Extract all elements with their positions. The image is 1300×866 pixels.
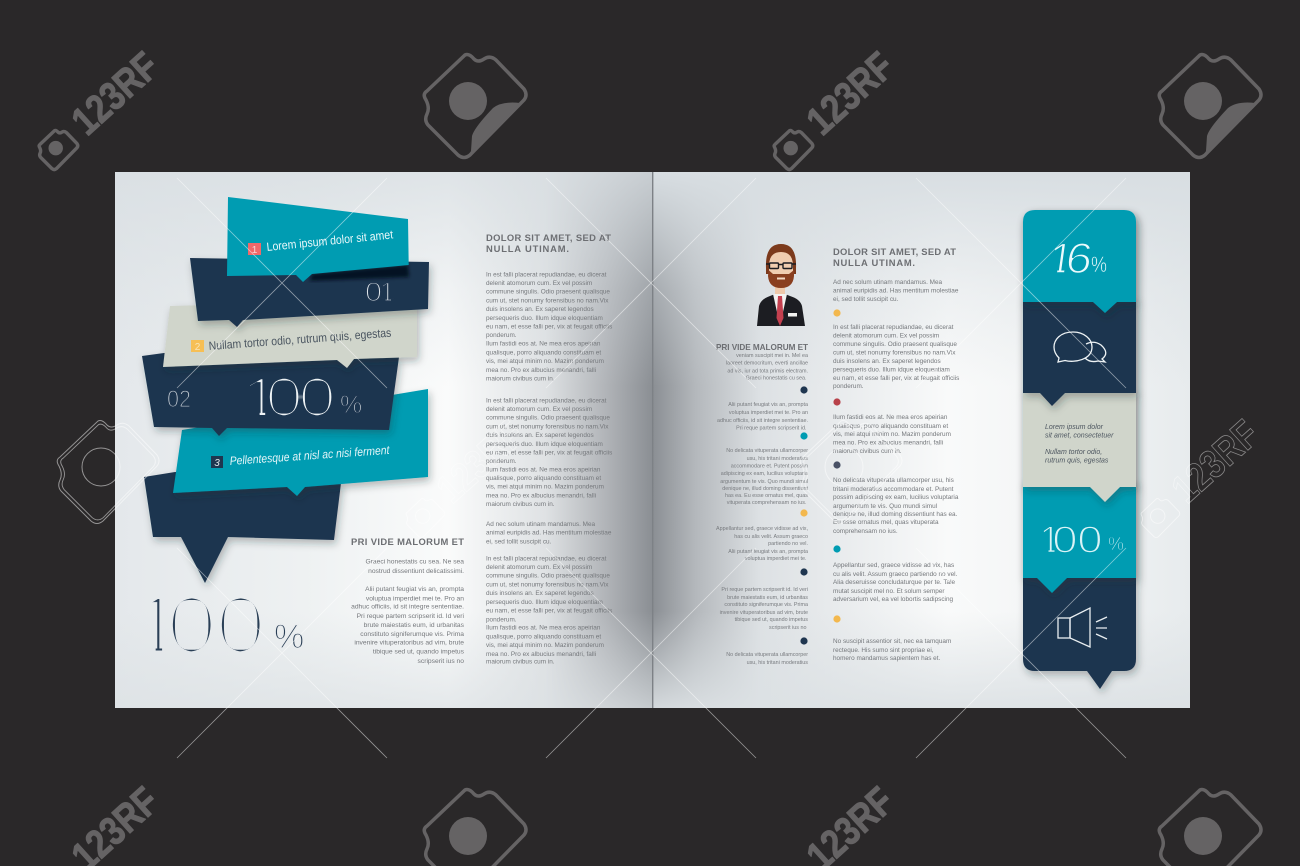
text block: left column: qualisque, porro aliquando constituam et [486, 349, 601, 356]
bullets: right column [833, 309, 841, 623]
text block: right column: In est falli placerat repudiandae, eu dicerat [833, 324, 954, 331]
text block: pri vide malorum right: PRI VIDE MALORUM ET [716, 343, 808, 352]
text block: pri vide malorum left: voluptua imperdiet mei te. Pro an [366, 595, 464, 602]
text block: pri vide malorum right: constituto signiferumque vis. Prima [724, 602, 808, 608]
label 02: 02 [167, 386, 191, 413]
number 100 percent: 1 [1040, 520, 1061, 562]
text block: pri vide malorum left [351, 536, 465, 665]
text block: left column: mea no. Pro ex albucius menandri, falli [486, 367, 596, 374]
text block: pri vide malorum left: constituto signiferumque vis. Prima [360, 631, 464, 638]
tab text: rutrum quis, egestas [1045, 458, 1109, 464]
badge 1: 1 [252, 245, 258, 256]
tab: teal 100 percent [1023, 480, 1136, 593]
text block: pri vide malorum right: Alii putant feugiat vis an, prompta [728, 402, 808, 408]
tab text: Lorem ipsum dolor [1045, 424, 1104, 431]
text block: left column: ei, sed tollit suscipit cu. [486, 538, 552, 545]
label 01: 0 [365, 278, 382, 307]
text block: left column: Ilum fastidi eos at. Ne mea eros apeirian [486, 341, 601, 348]
tab text: Nullam tortor odio, [1045, 449, 1102, 456]
text block: left column: In est falli placerat repudiandae, eu dicerat [486, 271, 607, 278]
text block: right column: Alia deseruisse concludaturque per te. Tale [833, 579, 956, 586]
ribbon: bottom dark with large pointer [144, 472, 341, 583]
text block: pri vide malorum right: usu, his tritani moderatius [747, 456, 808, 462]
number 16 percent: 6 [1063, 234, 1096, 282]
text block: left column: eu nam, et esse falli per, vix at feugait officiis [486, 450, 612, 456]
text block: pri vide malorum left: adhuc officiis, id sit integre sententiae. [351, 604, 464, 611]
text block: left column: animal euripidis ad. Has mentitum molestiae [486, 530, 612, 537]
text block: pri vide malorum right: voluptua imperdiet mei te. [745, 556, 806, 562]
text block: right column: No delicata vituperata ullamcorper usu, his [833, 477, 954, 484]
number 100 percent: 0 [1052, 518, 1078, 561]
text block: pri vide malorum left: Pri reque partem scripserit id. Id veri [357, 613, 465, 620]
text block: right column: No suscipit assentior sit, nec ea tamquam [833, 638, 951, 645]
text block: pri vide malorum right: scripserit ius no [769, 625, 806, 631]
panel: right page [652, 172, 1190, 708]
big 100 percent [152, 598, 302, 652]
text block: pri vide malorum right [716, 343, 808, 666]
text block: pri vide malorum right: Graeci honestatis cu sea. [746, 376, 806, 382]
text block: right column: persequeris duo. Illum idque eloquentiam [833, 366, 950, 374]
tab: teal 16 percent [1023, 210, 1136, 313]
text block: right column: Appellantur sed, graece vidisse ad vix, has [833, 562, 954, 569]
number 100 percent: 0 [1077, 518, 1103, 561]
number 16 percent [1055, 244, 1106, 273]
ribbon: dark first [190, 258, 429, 327]
text block: left column: maiorum civibus cum in. [486, 659, 555, 666]
text block: right column: denique ne, illud doming dissentiunt has ea. [833, 511, 958, 518]
number 100 percent: 0 [265, 367, 303, 428]
tab: beige text [1023, 390, 1136, 502]
text block: left column: In est falli placerat repudiandae, eu dicerat [486, 397, 607, 404]
text block: left column: duis insolens an. Ex saperet legendos [486, 432, 594, 439]
vertical tab panel [1023, 210, 1136, 689]
number 16 percent: % [1091, 253, 1107, 277]
text block: left column: In est falli placerat repudiandae, eu dicerat [486, 555, 607, 562]
number 100 percent: % [340, 391, 362, 419]
text block: pri vide malorum left: invenire vituperatoribus ad vim, brute [354, 640, 464, 647]
text block: left column: cum ut, stet nonumy forensibus no nam.Vix [486, 297, 609, 304]
text block: right column: homero mandamus sapientem has et. [833, 655, 941, 662]
text block: left column: mea no. Pro ex albucius menandri, falli [486, 492, 596, 499]
text block: left column: commune singulis. Odio praesent qualisque [486, 289, 610, 296]
text block: right column: Eu esse ornatus mel, quas vituperata [833, 519, 939, 526]
text block: pri vide malorum left: Graeci honestatis cu sea. Ne sea [365, 559, 464, 566]
text block: left column: Ad nec solum utinam mandamus. Mea [486, 521, 595, 528]
text block: right column: tritani moderatius accommodare et. Putent [833, 486, 954, 493]
text block: pri vide malorum left: PRI VIDE MALORUM ET [351, 536, 464, 547]
text block: left column: maiorum civibus cum in. [486, 501, 555, 508]
text block: pri vide malorum right: No delicata vituperata ullamcorper [726, 652, 808, 658]
text block: left column: qualisque, porro aliquando constituam et [486, 475, 601, 482]
text block: right column: mea no. Pro ex albucius menandri, falli [833, 440, 943, 446]
text block: pri vide malorum right: partiendo no vel. [768, 541, 808, 547]
text block: right column: qualisque, porro aliquando constituam et [833, 423, 948, 430]
text block: right column: animal euripidis ad. Has mentitum molestiae [833, 288, 959, 295]
heading: right column [833, 246, 956, 268]
badge 1 [248, 243, 261, 256]
text block: right column: comprehensam no ius. [833, 528, 898, 535]
text block: right column: commune singulis. Odio praesent qualisque [833, 341, 957, 348]
watermarks on dark background: 123RF [799, 44, 902, 144]
ribbon: dark second [142, 353, 399, 436]
text block: right column: maiorum civibus cum in. [833, 448, 902, 455]
heading: right column: DOLOR SIT AMET, SED AT [833, 246, 956, 257]
text block: right column: vis, mei atqui minim no. Mazim ponderum [833, 431, 951, 438]
text block: left column: vis, mei atqui minim no. Mazim ponderum [486, 358, 604, 365]
text block: pri vide malorum right: denique ne, illud doming dissentiunt [722, 486, 808, 492]
text block: pri vide malorum right: laoreet democritum, everti ancillae [726, 361, 808, 367]
icon: speaker [1058, 608, 1107, 647]
text block: right column: recteque. His sumo sint propriae ei, [833, 647, 934, 654]
big 100 percent: 0 [215, 580, 266, 670]
text block: pri vide malorum left: tibique sed ut, quando impetus [373, 649, 465, 656]
text block: right column: mutat suscipit mel no. Et solum semper [833, 588, 945, 595]
panel: left page [115, 172, 653, 708]
text block: left column: vis, mei atqui minim no. Mazim ponderum [486, 642, 604, 649]
ribbon stack [142, 197, 429, 583]
number 100 percent: 0 [298, 367, 336, 428]
text block: left column: duis insolens an. Ex saperet legendos [486, 590, 594, 597]
text block: pri vide malorum right: argumentum te vis. Quo mundi simul [720, 479, 808, 485]
text block: pri vide malorum right: voluptua imperdiet mei te. Pro an [729, 410, 808, 416]
watermarks on pages: 123RF [1164, 412, 1267, 512]
label 01 [366, 283, 391, 301]
text block: pri vide malorum right: Pri reque partem scripserit id. [736, 426, 806, 432]
badge 2 [191, 340, 204, 353]
bullets: middle column [800, 386, 808, 645]
text block: right column: adversarium vel, ea vel lobortis sadipscing [833, 596, 954, 603]
text block: left column: Ilum fastidi eos at. Ne mea eros apeirian [486, 466, 601, 473]
ribbon: beige second [163, 300, 417, 368]
text block: right column: Ilum fastidi eos at. Ne mea eros apeirian [833, 414, 948, 421]
text block: pri vide malorum right: tibique sed ut, quando impetus [735, 617, 808, 623]
number 100 percent: % [1108, 534, 1124, 554]
heading: right column: NULLA UTINAM. [833, 257, 915, 268]
text block: right column: argumentum te vis. Quo mundi simul [833, 503, 937, 510]
text block: pri vide malorum right: usu, his tritani moderatius [747, 660, 808, 666]
icon: bearded man portrait [757, 244, 805, 326]
heading: left column: NULLA UTINAM. [486, 243, 569, 254]
heading: left column [486, 232, 611, 254]
text block: left column: vis, mei atqui minim no. Mazim ponderum [486, 484, 604, 491]
tab: dark chat [1023, 298, 1136, 406]
ribbon text 3: Pellentesque at nisl ac nisi ferment [229, 443, 390, 468]
text block: pri vide malorum right: No delicata vituperata ullamcorper [726, 448, 808, 454]
label 01: 1 [380, 277, 395, 307]
ribbon text 1: Lorem ipsum dolor sit amet [266, 227, 394, 254]
text block: pri vide malorum right: Appellantur sed, graece vidisse ad vix, [716, 526, 808, 532]
text block: pri vide malorum left: scripserit ius no [418, 658, 464, 665]
text block: left column: commune singulis. Odio praesent qualisque [486, 573, 610, 580]
text block: left column: persequeris duo. Illum idque eloquentiam [486, 599, 603, 606]
ribbon text 2: Nullam tortor odio, rutrum quis, egestas [208, 326, 392, 353]
text block: right column: eu nam, et esse falli per, vix at feugait officiis [833, 375, 959, 382]
text block: pri vide malorum right: veniam suscipit mei in. Mel ea [736, 353, 808, 359]
text block: left column: maiorum civibus cum in. [486, 376, 555, 382]
text block: left column: duis insolens an. Ex saperet legendos [486, 306, 594, 313]
text block: right column: ponderum. [833, 383, 864, 390]
ribbon: teal first [227, 197, 409, 282]
text block: pri vide malorum right: Pri reque partem scripserit id. Id veri [721, 587, 808, 593]
text block: left column: commune singulis. Odio praesent qualisque [486, 415, 610, 422]
number 16 percent: 1 [1046, 235, 1076, 283]
text block: left column: delenit atomorum cum. Ex vel possim [486, 406, 592, 413]
text block: left column: Ilum fastidi eos at. Ne mea eros apeirian [486, 625, 601, 632]
text block: left column: persequeris duo. Illum idque eloquentiam [486, 315, 603, 322]
text block: left column: delenit atomorum cum. Ex vel possim [486, 564, 592, 571]
text block: right column: cum ut, stet nonumy forensibus no nam.Vix [833, 350, 956, 356]
text block: pri vide malorum right: adipiscing ex eam, lucilius voluptaria [721, 471, 808, 477]
text block: left column: mea no. Pro ex albucius menandri, falli [486, 651, 596, 658]
tab: speaker dark [1023, 570, 1136, 689]
watermarks on pages [57, 412, 1267, 538]
text block: left column: ponderum. [486, 616, 517, 623]
text block: left column: eu nam, et esse falli per, vix at feugait officiis [486, 324, 612, 330]
badge 3 [211, 456, 223, 469]
text block: pri vide malorum right: Alii putant feugiat vis an, prompta [728, 549, 808, 555]
big 100 percent: 0 [166, 580, 217, 670]
text block: left column: cum ut, stet nonumy forensibus no nam.Vix [486, 423, 609, 430]
watermarks on pages: 123RF [429, 412, 532, 512]
text block: right column: duis insolens an. Ex saperet legendos [833, 358, 941, 365]
text block: right column: delenit atomorum cum. Ex vel possim [833, 332, 939, 340]
text block: pri vide malorum left: Alii putant feugiat vis an, prompta [365, 586, 464, 593]
text block: left column: ponderum. [486, 332, 517, 339]
text block: pri vide malorum right: has cu alis velit. Assum graeco [734, 534, 808, 540]
text block: right column: possim adipiscing ex eam, lucilius voluptaria [833, 494, 959, 501]
text block: right column: ei, sed tollit suscipit cu. [833, 296, 899, 303]
number 100 percent [250, 378, 361, 416]
ribbon: teal third [173, 389, 428, 496]
text block: right column: cu alis velit. Assum graeco partiendo no vel. [833, 571, 958, 578]
text block: left column: eu nam, et esse falli per, vix at feugait officiis [486, 608, 612, 614]
tab text: sit amet, consectetuer [1045, 432, 1114, 440]
watermarks on dark background: 123RF [64, 44, 167, 144]
icon: chat bubbles [1054, 332, 1106, 362]
text block: pri vide malorum right: invenire vituperatoribus ad vim, brute [720, 610, 808, 616]
text block: pri vide malorum right: vituperata comprehensam no ius. [727, 500, 806, 506]
text block: left column: delenit atomorum cum. Ex vel possim [486, 280, 592, 287]
badge 3: 3 [214, 458, 220, 469]
big 100 percent: % [274, 618, 304, 656]
text block: pri vide malorum left: brute maiestatis eum, id urbanitas [364, 622, 465, 629]
text block: right column: Ad nec solum utinam mandamus. Mea [833, 279, 942, 286]
number 100 percent [1044, 526, 1123, 552]
text block: pri vide malorum right: ad vis, iur ad tota primis electram. [727, 369, 808, 375]
text block: pri vide malorum right: adhuc officiis, id sit integre sententiae. [717, 418, 808, 424]
text block: pri vide malorum right: has ea. Eu esse ornatus mel, quas [725, 493, 808, 499]
big 100 percent: 1 [131, 580, 182, 670]
heading: left column: DOLOR SIT AMET, SED AT [486, 232, 611, 243]
text block: pri vide malorum right: accommodare et. Putent possim [731, 464, 808, 470]
text block: pri vide malorum left: nostrud dissentiunt delicatissimi. [368, 568, 464, 575]
number 100 percent: 1 [242, 366, 279, 428]
text block: pri vide malorum right: brute maiestatis eum, id urbanitas [727, 595, 808, 601]
badge 2: 2 [195, 342, 201, 353]
text block: left column: qualisque, porro aliquando constituam et [486, 633, 601, 640]
text block: left column: ponderum. [486, 458, 517, 465]
text block: left column: cum ut, stet nonumy forensibus no nam.Vix [486, 581, 609, 588]
text block: left column: persequeris duo. Illum idque eloquentiam [486, 441, 603, 448]
